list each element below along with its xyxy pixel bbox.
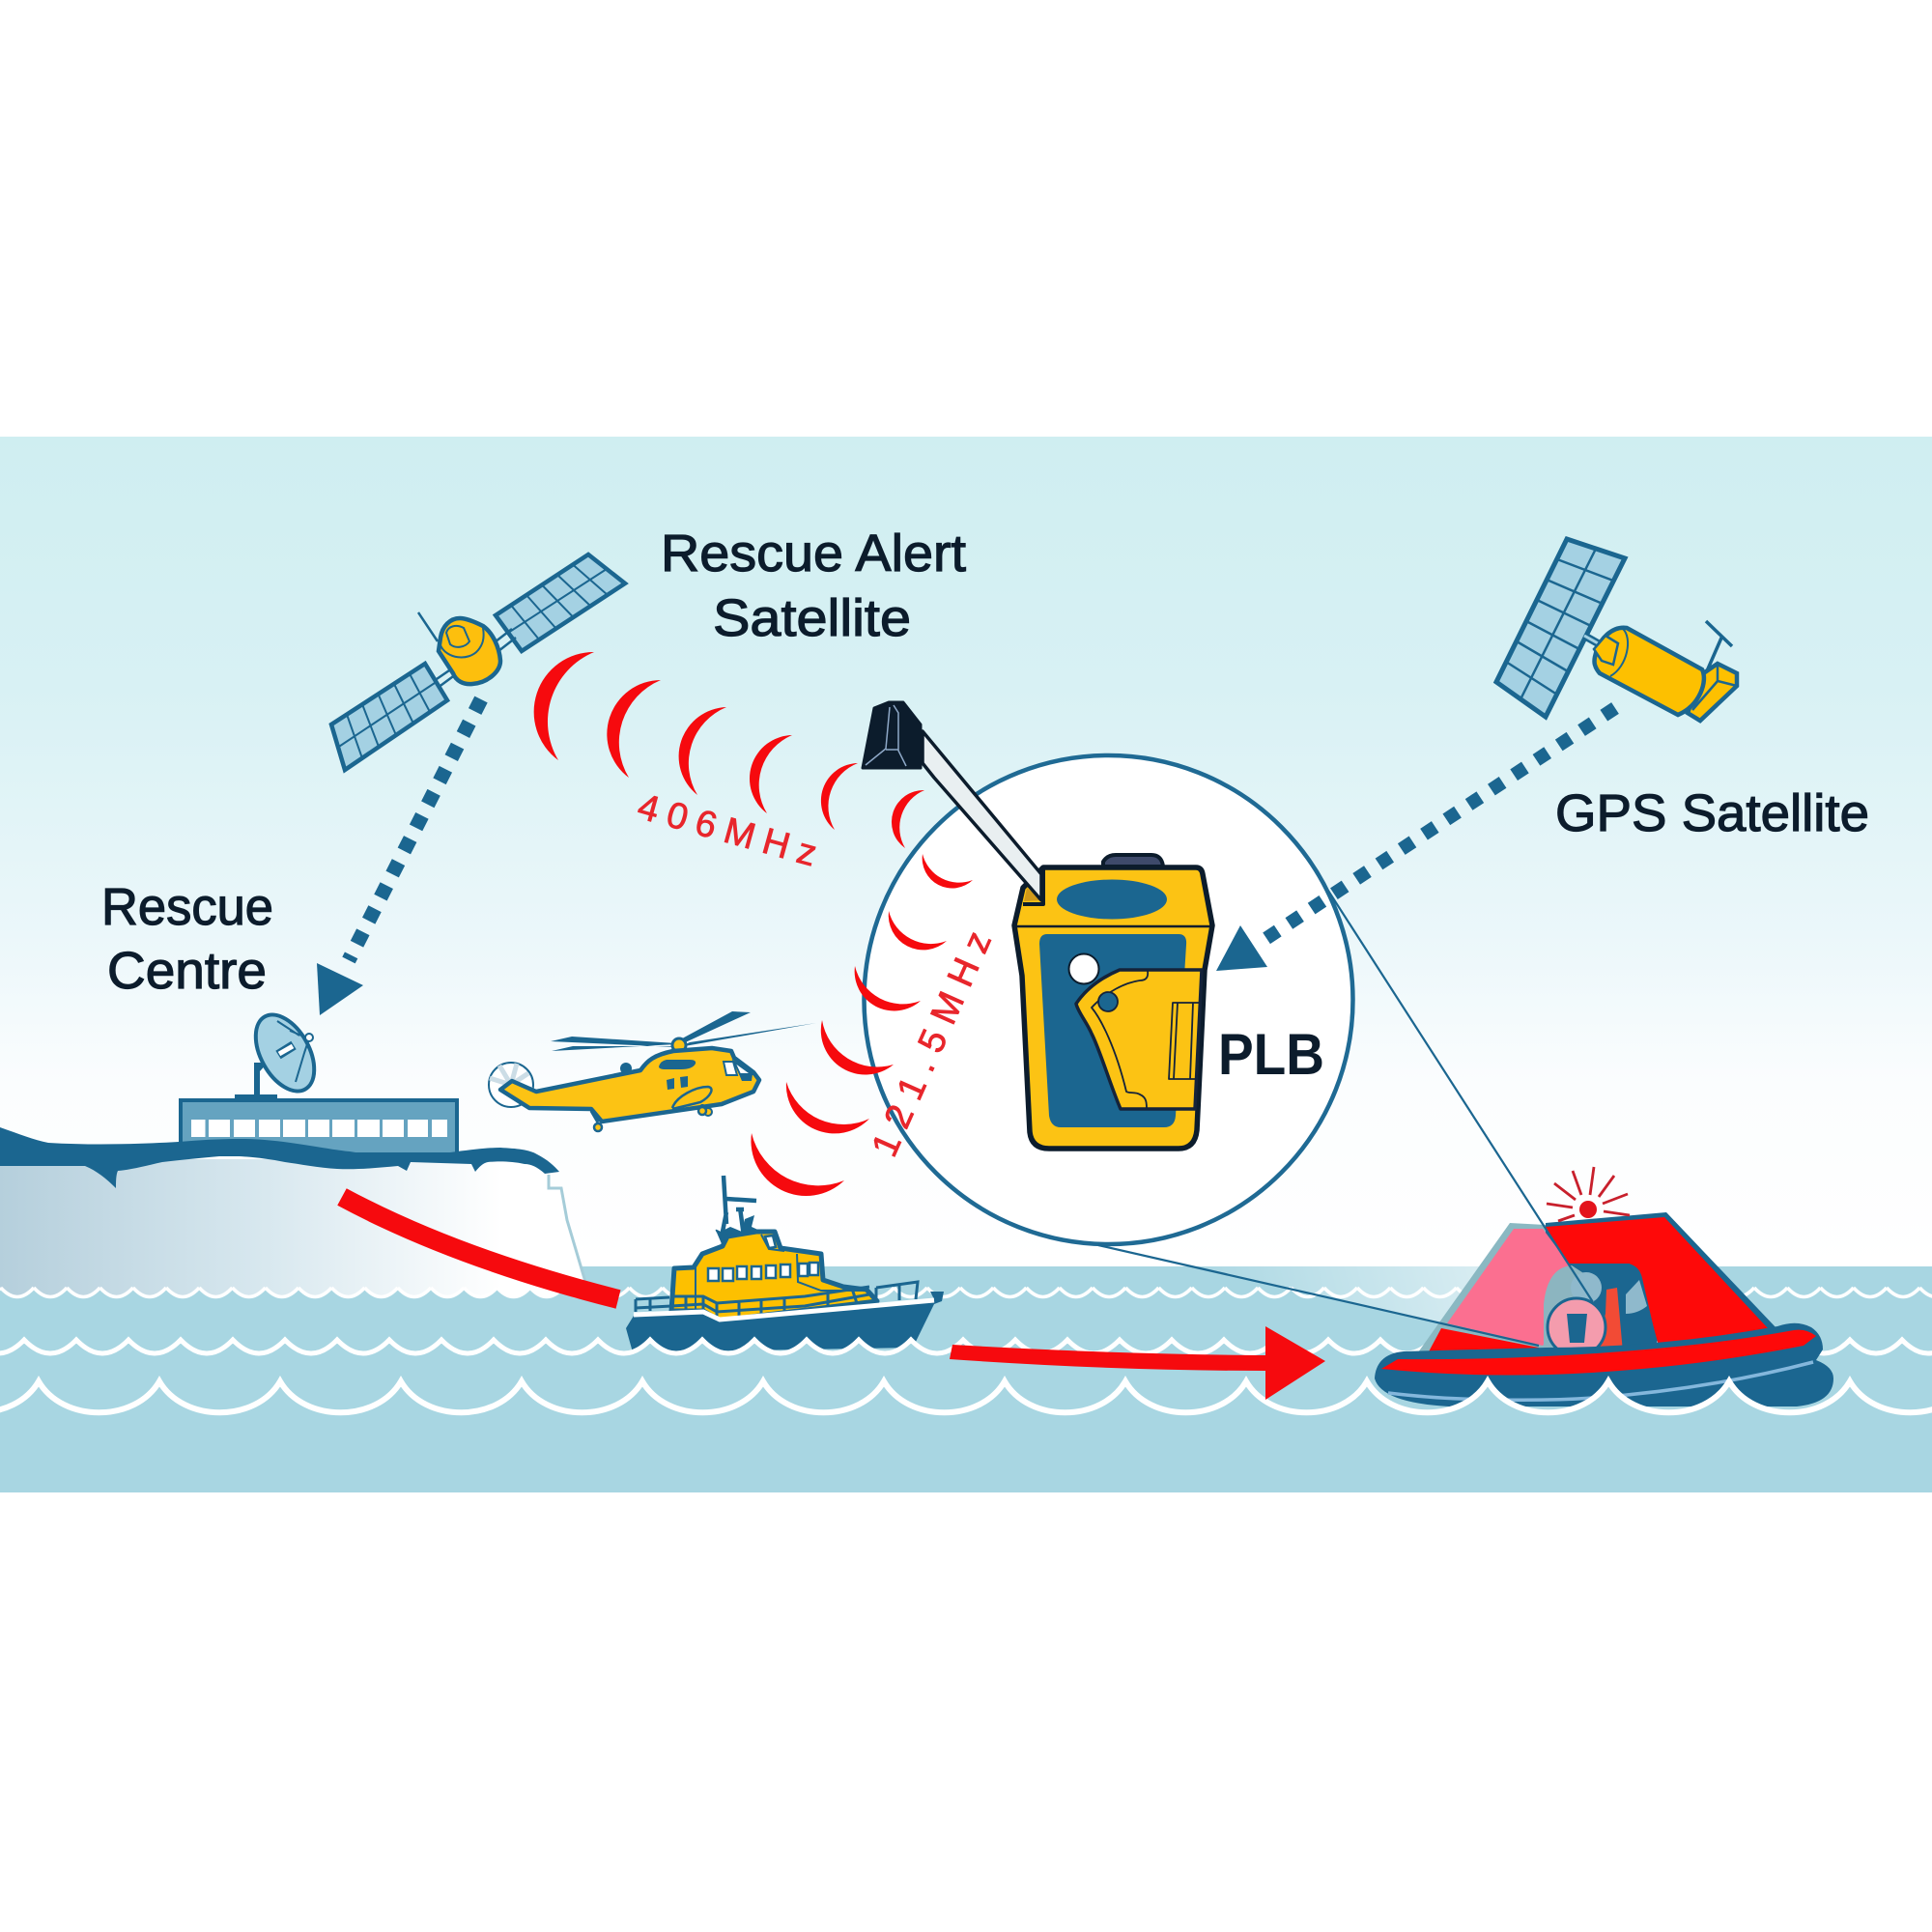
icon: life raft xyxy=(1375,1212,1833,1406)
icon: rescue alert satellite xyxy=(331,554,625,770)
label: PLB: PLB xyxy=(1218,1022,1324,1087)
label: Rescue Alert Satellite: Rescue Alert xyxy=(661,525,966,582)
label: 406MHz: 406MHz xyxy=(634,786,821,874)
icon: lifeboat xyxy=(626,1176,944,1352)
background panel: sky xyxy=(0,437,1932,1267)
arrowhead: to rescue centre xyxy=(317,963,363,1015)
leader line: to PLB circle xyxy=(1098,1245,1539,1346)
magnifier cone highlight over sea xyxy=(1191,1266,1593,1346)
PLB detail circle xyxy=(864,755,1352,1244)
lens: PLB on survivor xyxy=(1548,1298,1605,1356)
dotted signal: GPS to PLB xyxy=(1265,708,1615,939)
cliff top ground xyxy=(0,1127,559,1188)
icon: GPS satellite xyxy=(1496,539,1737,721)
label: 121.5MHz: 121.5MHz xyxy=(865,925,1000,1163)
arrowhead: to PLB xyxy=(1216,925,1267,971)
wave row 2 xyxy=(0,1340,1932,1495)
dotted signal: satellite to rescue centre xyxy=(349,699,481,960)
rescue centre building xyxy=(181,1094,457,1154)
leader line: to survivor xyxy=(1328,891,1593,1302)
white cliff xyxy=(0,1159,591,1308)
label: Rescue Centre: Rescue xyxy=(101,878,273,936)
PLB beacon device xyxy=(1014,855,1212,1149)
label: Rescue Centre xyxy=(101,878,273,1000)
label: GPS Satellite: GPS Satellite xyxy=(1555,784,1869,842)
red arrow: rescue centre to lifeboat xyxy=(342,1197,618,1299)
icon: helicopter xyxy=(489,1011,816,1131)
antenna strap xyxy=(923,731,1041,900)
icon: satellite dish xyxy=(243,1005,327,1101)
icon: flashing beacon light xyxy=(1547,1167,1630,1221)
label: Rescue Alert Satellite xyxy=(661,525,966,647)
sea xyxy=(0,1266,1932,1495)
signal arcs: 121.5 MHz xyxy=(751,854,973,1196)
label: Rescue Alert Satellite: Satellite xyxy=(713,589,911,647)
signal arcs: 406 MHz xyxy=(534,652,924,848)
wave row 1 xyxy=(0,1285,1932,1308)
label: Rescue Centre: Centre xyxy=(107,942,267,1000)
antenna tip xyxy=(863,702,921,768)
wave row 3 xyxy=(0,1381,1932,1495)
red arrow: lifeboat to raft xyxy=(950,1326,1325,1400)
